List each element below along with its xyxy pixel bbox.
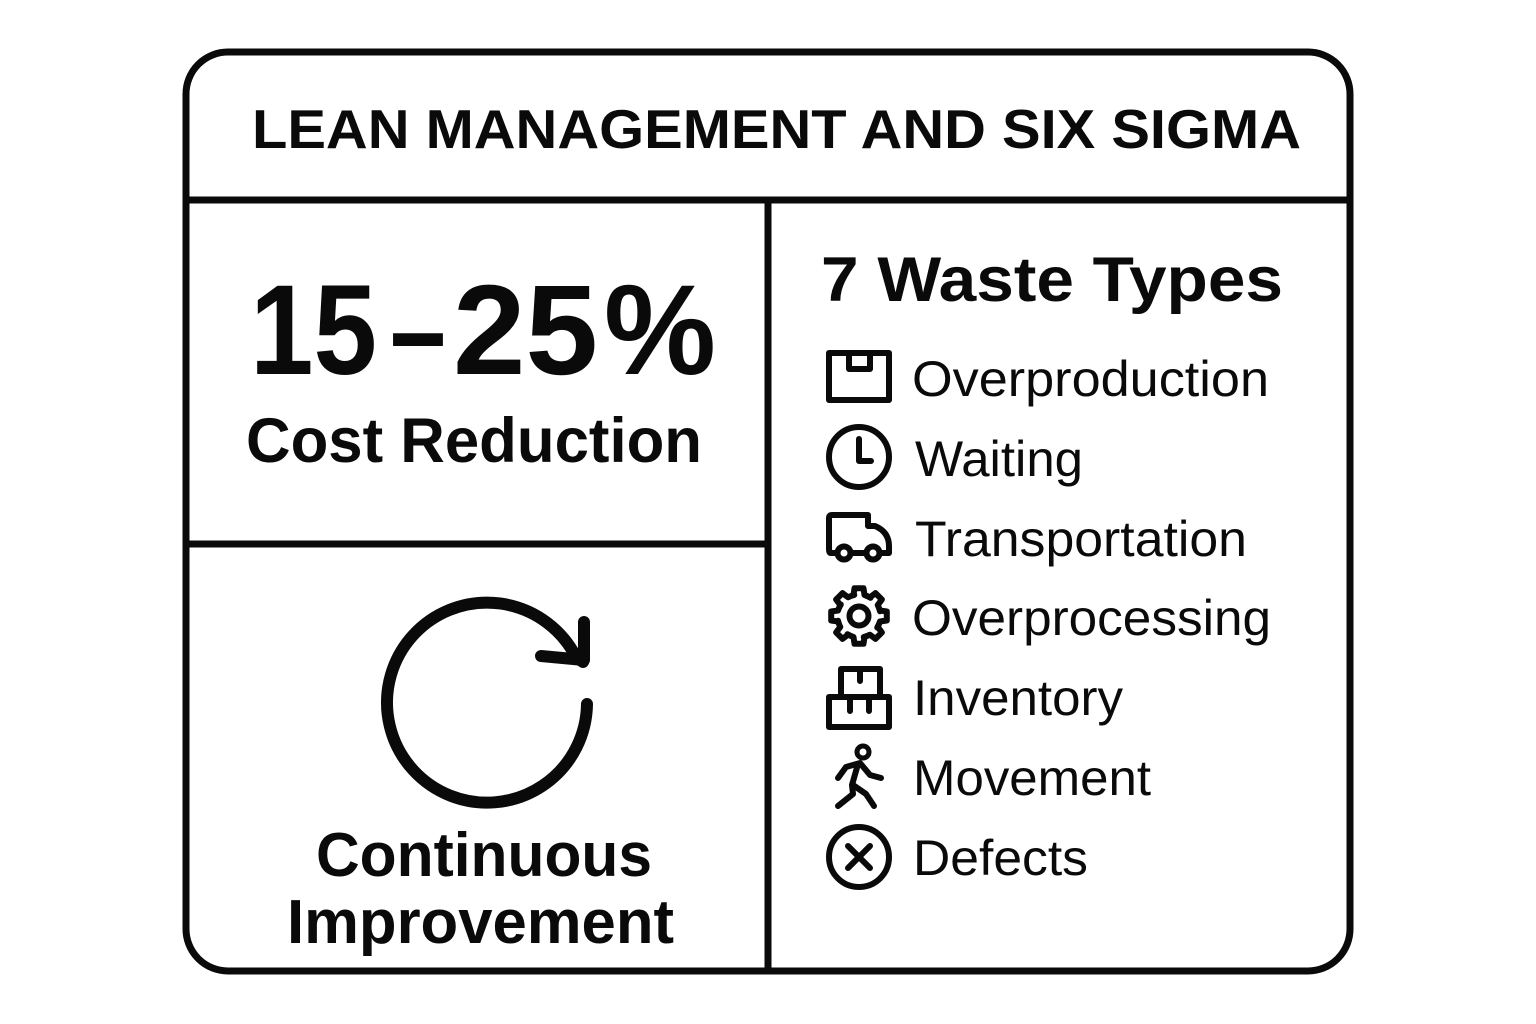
label: waiting: Waiting xyxy=(915,431,1083,487)
label: transportation: Transportation xyxy=(915,511,1247,567)
icon: walking person xyxy=(838,746,881,806)
outer frame xyxy=(186,52,1350,971)
panel: continuous improvement xyxy=(287,603,674,957)
icon: stacked boxes xyxy=(829,669,889,727)
waste types heading: 7 Waste Types xyxy=(821,245,1283,315)
panel: waste types xyxy=(821,245,1283,887)
label: overproduction: Overproduction xyxy=(912,351,1269,407)
icon: clock xyxy=(829,427,889,487)
label: defects: Defects xyxy=(913,830,1088,886)
cost reduction figure: % xyxy=(604,259,716,402)
cost reduction figure: – xyxy=(390,259,446,402)
cost reduction label: Cost Reduction xyxy=(246,406,702,476)
icon: circular arrow xyxy=(387,603,587,803)
panel: cost reduction xyxy=(246,259,716,476)
cost reduction figure: 25 xyxy=(453,259,598,402)
icon: gear xyxy=(831,588,887,644)
icon: truck xyxy=(829,515,889,560)
icon: x circle xyxy=(829,827,889,887)
label: movement: Movement xyxy=(913,750,1151,806)
icon: box xyxy=(829,353,889,400)
title: LEAN MANAGEMENT AND SIX SIGMA xyxy=(252,98,1301,160)
continuous improvement label: Continuous xyxy=(316,821,652,890)
cost reduction figure xyxy=(250,259,716,402)
label: overprocessing: Overprocessing xyxy=(912,590,1271,646)
cost reduction figure: 15 xyxy=(250,259,377,402)
label: inventory: Inventory xyxy=(913,670,1123,726)
continuous improvement label line 2: Improvement xyxy=(287,888,674,957)
